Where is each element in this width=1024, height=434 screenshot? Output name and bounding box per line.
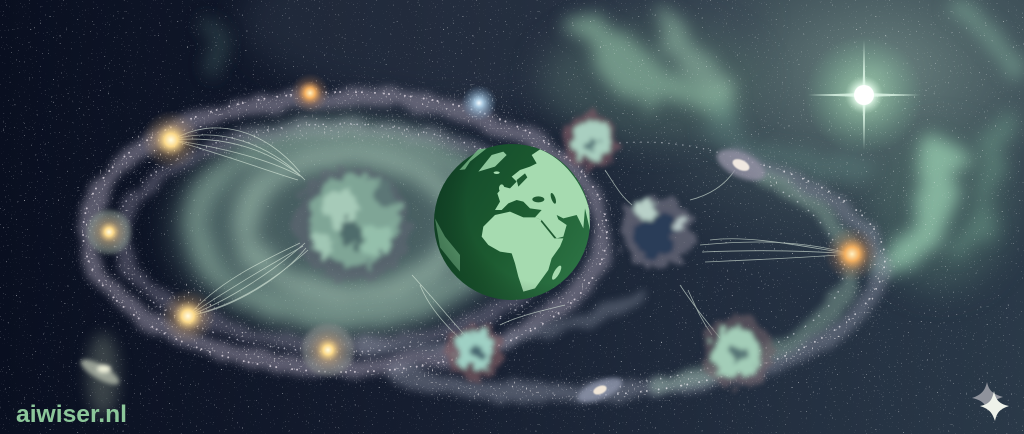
ring: right green band: [660, 180, 851, 385]
rings: left spiral system: [87, 97, 603, 367]
fibre fans: light filaments: [172, 128, 852, 352]
land: Eurasia: [495, 149, 590, 238]
bright star: large green flare: [804, 35, 924, 155]
ring: star beads middle: [114, 124, 566, 352]
globe: [434, 144, 590, 300]
bright star: lower left gold: [160, 288, 216, 344]
ring: lower sweep behind globe: [360, 295, 640, 348]
ring: star beads outer: [83, 92, 607, 372]
ring: inner right star beads: [640, 185, 843, 382]
nebula: green clouds upper right: [215, 10, 1024, 260]
sea: Black Sea: [532, 196, 544, 202]
sea: Red Sea: [541, 220, 557, 238]
logo: aiwiser.nl: aiwiser.nl: [16, 401, 127, 428]
dust: dense star speckle along rings: [66, 74, 900, 416]
land: Africa: [482, 212, 563, 292]
ring: wide green halo: [195, 133, 495, 317]
icon: sparkle watermark: [972, 382, 1009, 421]
sea: Baltic: [517, 173, 527, 187]
galaxy: far lower left: [77, 333, 123, 417]
land: South America: [435, 218, 460, 272]
land: North America: [459, 148, 487, 170]
fibres: upper-left star to burst: [172, 128, 305, 180]
rings: star beads: [83, 92, 885, 395]
ring: outer violet band: [87, 97, 603, 367]
ring: second violet band: [122, 128, 558, 344]
halo: green disc: [175, 123, 515, 333]
ring: right outer band: [395, 158, 880, 393]
land: Iceland: [494, 171, 500, 174]
fibres: nebula links: [412, 170, 735, 352]
nebula node: lower: [447, 324, 503, 380]
nebula: central green burst: [294, 167, 410, 283]
fibres: orange star to blue nebula: [700, 239, 852, 262]
land: Greenland: [478, 152, 507, 172]
bright star: upper left gold: [141, 110, 201, 170]
bright star: top blue cluster: [461, 85, 497, 121]
bright star: right orange: [824, 226, 880, 282]
nebula node: lower right: [702, 316, 774, 388]
bright star: top orange: [290, 73, 330, 113]
ring: top connection beads: [620, 142, 735, 158]
rings: right spiral system: [360, 158, 880, 393]
galaxy: left ring: [87, 210, 131, 254]
land: Madagascar: [550, 264, 563, 281]
globe: shading: [434, 144, 590, 300]
galaxy: bottom: [574, 373, 626, 407]
land: Britain: [499, 184, 504, 192]
nebula node: upper: [563, 112, 619, 168]
galaxy: upper right: [712, 143, 770, 187]
fibres: lower-left star to burst: [188, 243, 308, 316]
nebula node: middle blue: [621, 196, 693, 268]
sea: Caspian: [550, 192, 557, 204]
galaxy: lower left ring: [302, 324, 354, 376]
ring: inner green halo: [245, 155, 455, 295]
globe: continents: [435, 148, 590, 292]
ring: right star beads: [600, 160, 885, 395]
globe: sphere: [434, 144, 590, 300]
